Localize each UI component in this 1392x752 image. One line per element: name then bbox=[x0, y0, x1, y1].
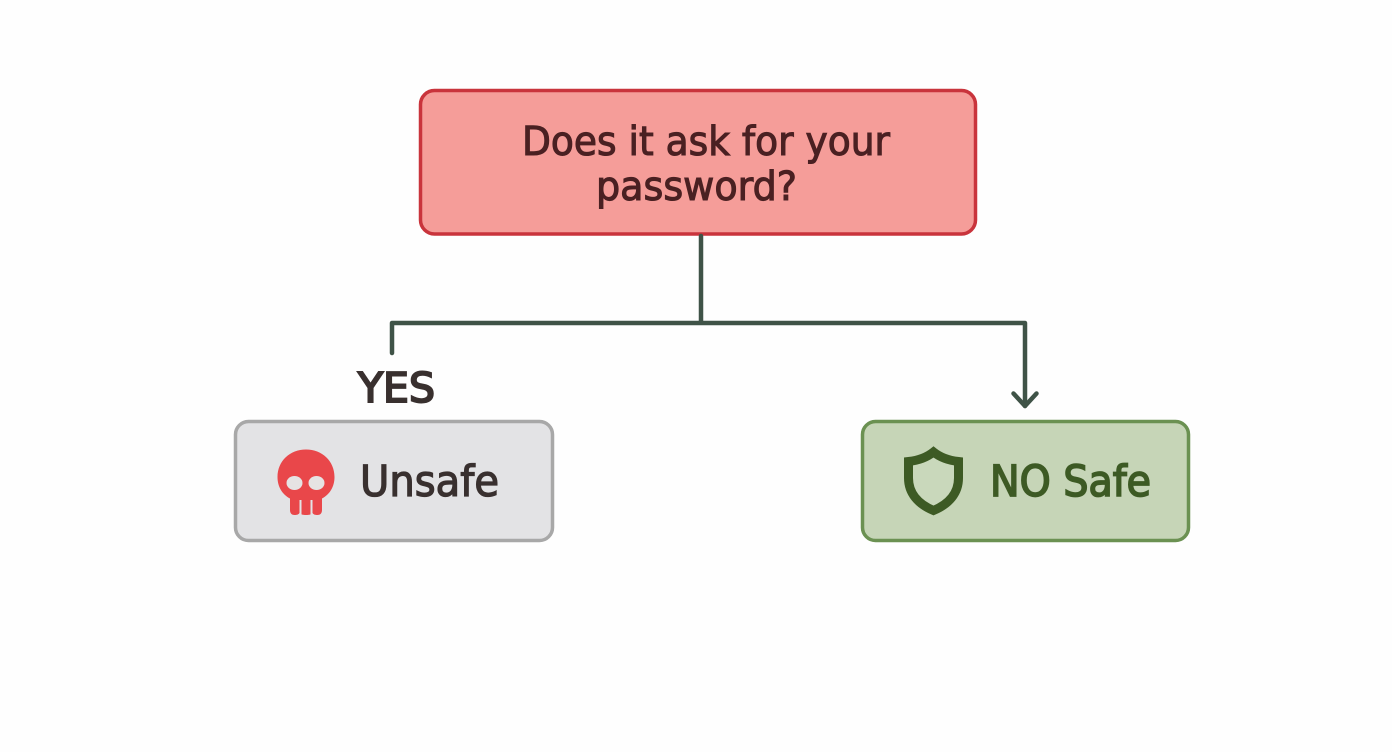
icon: shield bbox=[908, 452, 958, 510]
question text bbox=[522, 119, 891, 210]
connector lines bbox=[392, 236, 1036, 406]
icon: skull bbox=[278, 450, 334, 515]
unsafe box bbox=[236, 422, 552, 540]
safe text: NO Safe bbox=[990, 458, 1151, 507]
safe box bbox=[862, 422, 1188, 540]
unsafe text: Unsafe bbox=[360, 458, 499, 507]
question text: password? bbox=[596, 164, 797, 210]
question box bbox=[420, 90, 976, 234]
arrow head bbox=[1014, 394, 1036, 406]
question text: Does it ask for your bbox=[522, 119, 891, 165]
YES label: YES bbox=[357, 364, 435, 412]
